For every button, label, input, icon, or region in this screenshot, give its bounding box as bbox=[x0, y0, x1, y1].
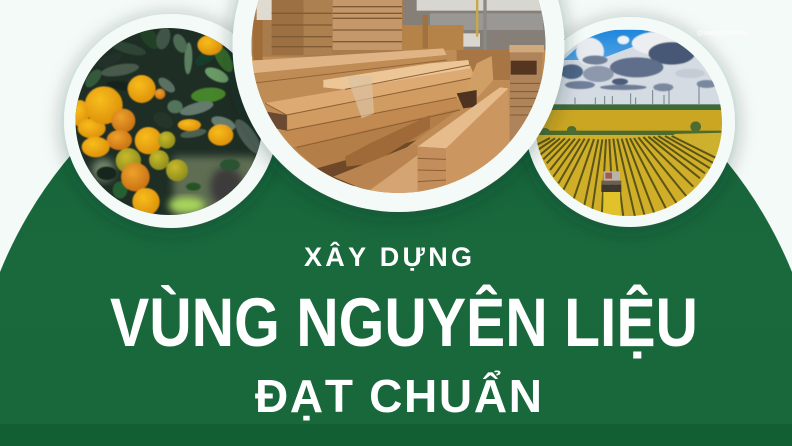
background stacks bbox=[253, 0, 513, 80]
watermark: @reallygreatsite bbox=[697, 30, 747, 37]
photo circle: stacked timber bbox=[230, 0, 570, 220]
fields bbox=[536, 104, 722, 216]
wind turbines bbox=[575, 85, 699, 104]
front board bbox=[418, 87, 509, 193]
harvester bbox=[601, 171, 621, 192]
right stack bbox=[509, 45, 544, 145]
leaves bbox=[82, 24, 266, 199]
main boards bbox=[252, 48, 493, 195]
heading: VÙNG NGUYÊN LIỆU: VÙNG NGUYÊN LIỆU bbox=[110, 284, 698, 361]
clouds bbox=[560, 31, 717, 91]
heading: XÂY DỰNG: XÂY DỰNG bbox=[304, 241, 472, 272]
oranges bbox=[71, 35, 233, 215]
photo circle: orange tree bbox=[60, 14, 290, 228]
photo circle: rice field bbox=[520, 17, 750, 227]
heading: ĐẠT CHUẨN: ĐẠT CHUẨN bbox=[255, 370, 542, 422]
